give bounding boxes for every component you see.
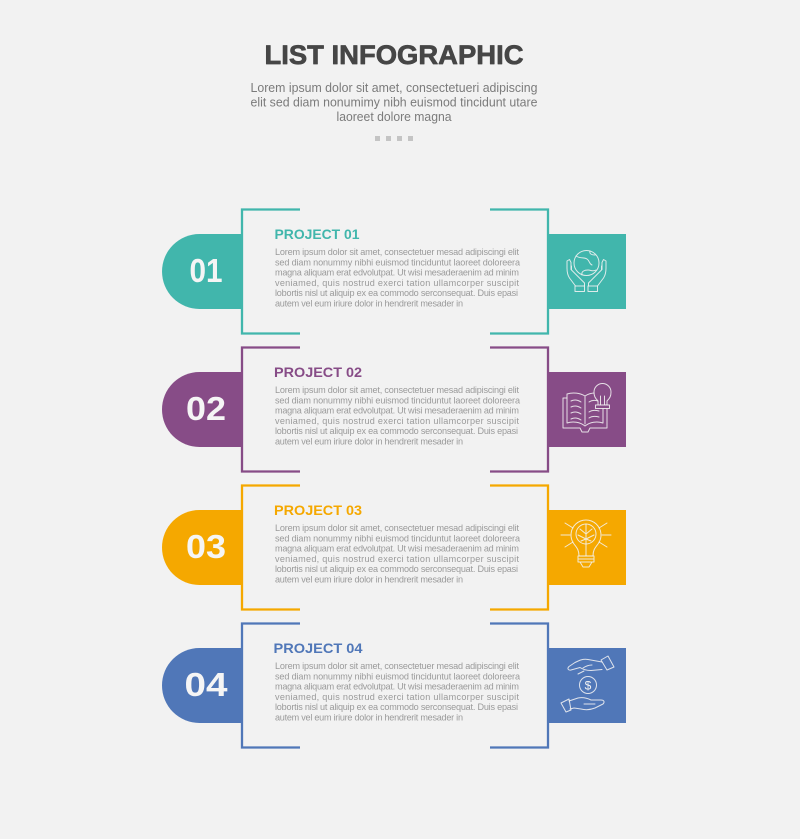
panel: project 04 (162, 624, 626, 748)
heading: PROJECT 02 (274, 364, 362, 380)
body text (275, 385, 521, 446)
body text: Lorem ipsum dolor sit amet, consectetuer mesad adipiscingi elit (275, 247, 519, 257)
subtitle text block: laoreet dolore magna (336, 110, 452, 124)
bracket frame (242, 486, 548, 610)
body text: autem vel eum iriure dolor in hendrerit mesader in (275, 436, 463, 446)
bracket frame (242, 348, 548, 472)
body text: Lorem ipsum dolor sit amet, consectetuer mesad adipiscingi elit (275, 523, 519, 533)
icon tab: hands with dollar coin (548, 648, 626, 723)
bracket frame (242, 210, 548, 334)
number tab 04: 04 (184, 666, 228, 703)
body text: autem vel eum iriure dolor in hendrerit mesader in (275, 298, 463, 308)
body text: lobortis nisl ut aliquip ex ea commodo serconsequat. Duis epasi (275, 426, 518, 436)
subtitle text block: Lorem ipsum dolor sit amet, consectetueri adipiscing (250, 81, 538, 95)
number tab 01: 01 (190, 252, 222, 289)
body text: veniamed, quis nostrud exerci tation ullamcorper suscipit (275, 416, 519, 426)
body text: Lorem ipsum dolor sit amet, consectetuer mesad adipiscingi elit (275, 661, 519, 671)
body text: veniamed, quis nostrud exerci tation ullamcorper suscipit (275, 692, 519, 702)
icon tab: hands with dollar coin: $ (585, 678, 592, 692)
body text (275, 523, 521, 584)
number tab 02 (162, 372, 242, 447)
icon tab: light bulb with brain (548, 510, 626, 585)
heading: PROJECT 03 (274, 502, 362, 518)
body text: magna aliquam erat edvolutpat. Ut wisi mesaderaenim ad minim (275, 544, 519, 554)
panel: project 02 (162, 348, 626, 472)
body text: lobortis nisl ut aliquip ex ea commodo serconsequat. Duis epasi (275, 564, 518, 574)
panel: project 01 (162, 210, 626, 334)
icon tab: hands holding globe (548, 234, 626, 309)
body text: magna aliquam erat edvolutpat. Ut wisi mesaderaenim ad minim (275, 682, 519, 692)
heading: PROJECT 01 (274, 226, 360, 242)
body text: sed diam nonummy nibhi euismod tinciduntut laoreet doloreera (275, 257, 521, 267)
body text: lobortis nisl ut aliquip ex ea commodo serconsequat. Duis epasi (275, 288, 518, 298)
body text: sed diam nonummy nibhi euismod tinciduntut laoreet doloreera (275, 533, 521, 543)
body text: lobortis nisl ut aliquip ex ea commodo serconsequat. Duis epasi (275, 702, 518, 712)
body text: Lorem ipsum dolor sit amet, consectetuer mesad adipiscingi elit (275, 385, 519, 395)
icon tab: open book with light bulb (548, 372, 626, 447)
subtitle text block (250, 81, 538, 124)
body text: autem vel eum iriure dolor in hendrerit mesader in (275, 574, 463, 584)
heading: PROJECT 04 (274, 640, 363, 656)
body text: sed diam nonummy nibhi euismod tinciduntut laoreet doloreera (275, 395, 521, 405)
body text (275, 247, 521, 308)
body text: veniamed, quis nostrud exerci tation ullamcorper suscipit (275, 554, 519, 564)
number tab 01 (162, 234, 242, 309)
number tab 03: 03 (186, 528, 226, 565)
body text: sed diam nonummy nibhi euismod tinciduntut laoreet doloreera (275, 671, 521, 681)
body text (275, 661, 521, 722)
body text: autem vel eum iriure dolor in hendrerit mesader in (275, 712, 463, 722)
title: LIST INFOGRAPHIC (264, 40, 524, 70)
pagination dots (375, 136, 413, 141)
body text: magna aliquam erat edvolutpat. Ut wisi mesaderaenim ad minim (275, 406, 519, 416)
number tab 04 (162, 648, 242, 723)
body text: magna aliquam erat edvolutpat. Ut wisi mesaderaenim ad minim (275, 268, 519, 278)
subtitle text block: elit sed diam nonumimy nibh euismod tincidunt utare (250, 96, 538, 110)
bracket frame (242, 624, 548, 748)
panel: project 03 (162, 486, 626, 610)
body text: veniamed, quis nostrud exerci tation ullamcorper suscipit (275, 278, 519, 288)
number tab 02: 02 (186, 390, 226, 427)
number tab 03 (162, 510, 242, 585)
